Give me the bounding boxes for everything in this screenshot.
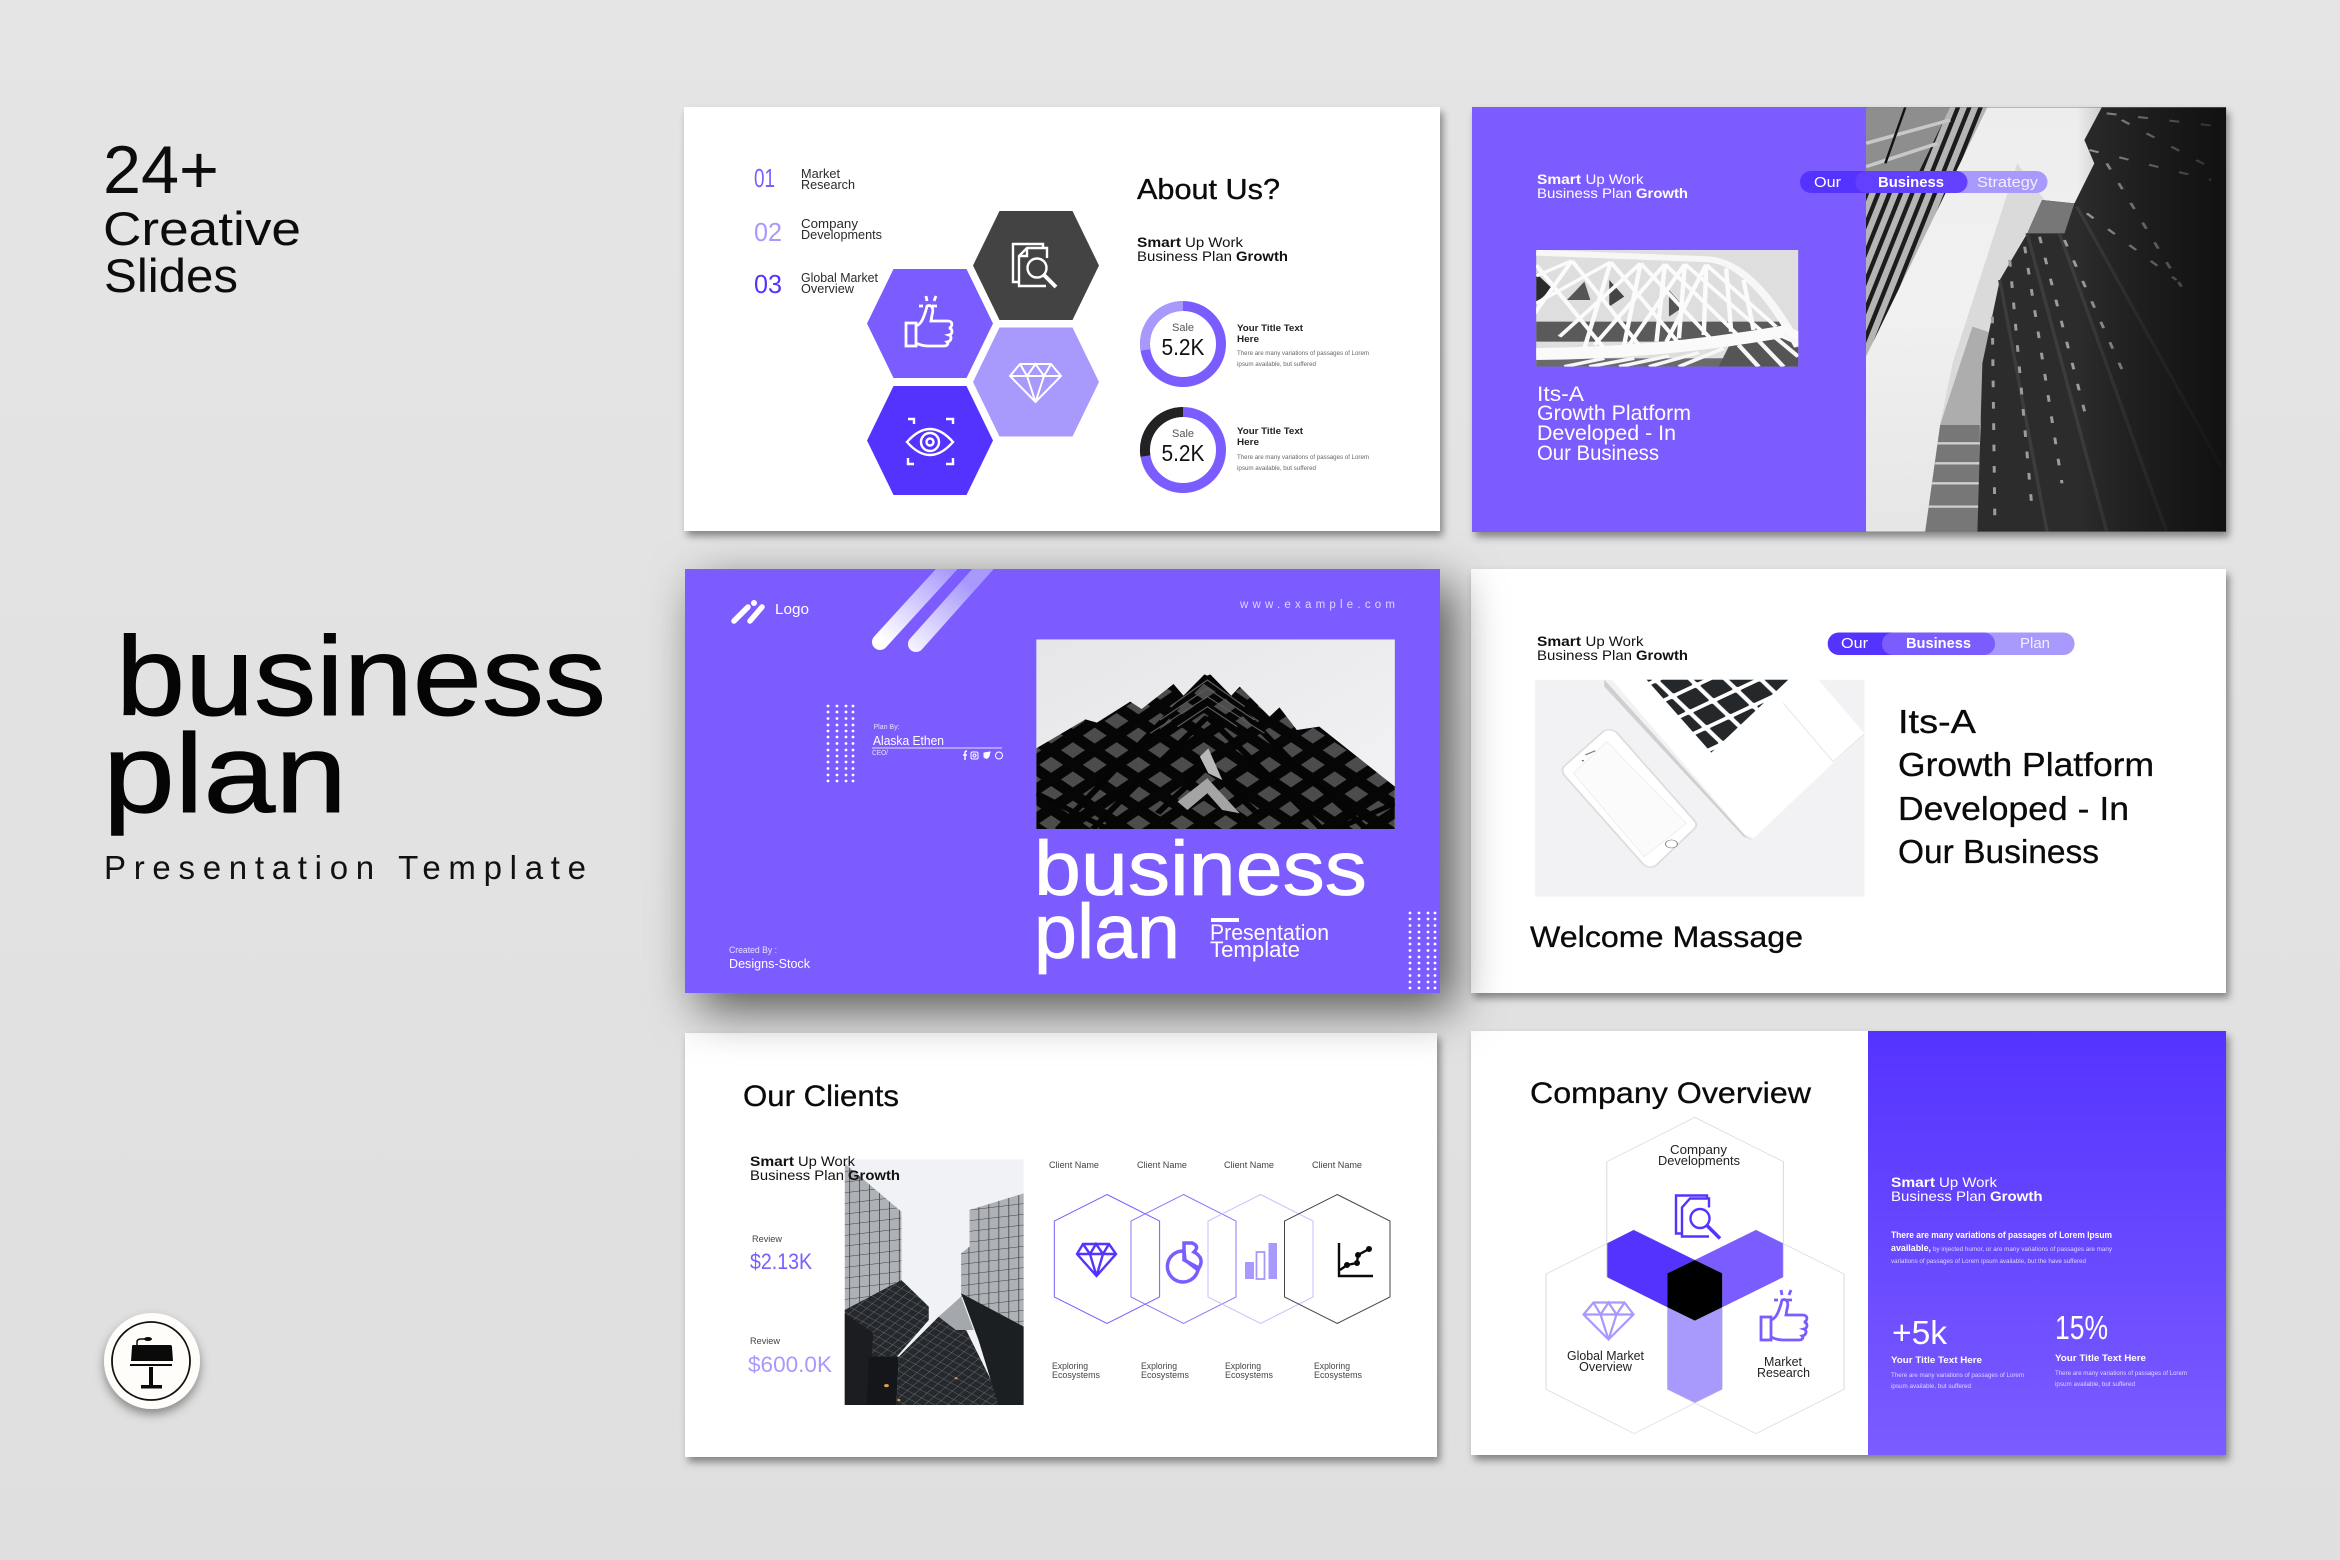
heading: business plan: plan [1034,889,1180,975]
photo: white truss bridge [1535,250,1798,367]
subheading: Up Work [1586,171,1645,187]
subheading: Business Plan [1537,647,1632,663]
donut chart: sale one: Sale [1172,322,1194,334]
diagram labels: Research [1757,1365,1810,1380]
heading: business plan [103,614,606,836]
text block: second stat: There are many variations of passages of Lorem [1237,454,1369,461]
heading: welcome massage: Welcome Massage [1530,921,1803,954]
photo: black tower against sky [1036,639,1395,829]
numbered list: Developments [801,227,882,242]
heading: about us: About Us? [1137,174,1280,206]
stat: review two: Review [750,1336,781,1346]
subheading: presentation template: Presentation [1210,920,1329,945]
panel: company overview slide [1471,1031,2226,1455]
paragraph: by injected humor, or are many variations of passages are many [1933,1246,2113,1253]
text block: first stat: Here [1237,334,1259,345]
subheading [1537,633,1688,663]
credit block [729,945,811,971]
diagram labels: Overview [1579,1359,1633,1374]
icon: line chart [1339,1243,1373,1276]
donut chart: sale two [1145,412,1221,488]
ecosystem labels: Exploring [1052,1361,1088,1371]
subheading: Business Plan [1137,248,1232,264]
subheading: Up Work [1939,1174,1998,1190]
subheading: Business Plan [750,1167,844,1183]
ecosystem labels [1052,1361,1362,1380]
ecosystem labels: Ecosystems [1141,1370,1189,1380]
stat: fifteen percent: 15% [2055,1309,2108,1346]
numbered list [754,163,882,299]
stat: fifteen percent [2055,1309,2187,1388]
panel: about us slide [684,107,1440,531]
client labels: Client Name [1049,1160,1099,1170]
icon: purple diamond [1077,1244,1116,1276]
hexagon cluster [867,211,1099,495]
stat: review one: $2.13K [750,1249,812,1274]
stat: plus five k [1891,1314,2024,1390]
heading: company overview: Company Overview [1530,1077,1811,1110]
stat: plus five k: Your Title Text Here [1891,1355,1982,1366]
icon: thumbs up [1761,1290,1807,1340]
social icons [963,751,1002,760]
panel: cover slide [685,560,1440,993]
pill navigation: Strategy [1977,174,2039,191]
dot grid [827,705,854,782]
text block: second stat: Here [1237,437,1259,448]
dot grid [1409,912,1436,989]
headline text: Growth Platform [1898,746,2154,783]
heading: 24+ creative slides: Creative [103,202,301,255]
logo [734,600,809,621]
right gradient panel [1868,1031,2226,1455]
photo: glass towers [845,1159,1024,1405]
text block: first stat [1237,323,1369,368]
subheading: Growth [1636,647,1688,663]
diagram labels: Developments [1658,1153,1740,1168]
ecosystem labels: Exploring [1141,1361,1177,1371]
logo: Logo [775,601,809,618]
subheading [1891,1174,2042,1204]
heading: our clients: Our Clients [743,1080,899,1113]
headline text: Its-A [1898,703,1976,740]
subheading: presentation template: Template [1210,937,1300,962]
ecosystem labels: Ecosystems [1225,1370,1273,1380]
icon: thumbs up [906,296,952,346]
subheading [1537,171,1688,201]
headline text: Developed - In [1898,790,2129,827]
website url: www.example.com [1239,599,1395,611]
heading: business plan: business [116,614,606,739]
stat: fifteen percent: There are many variations of passages of Lorem [2055,1370,2187,1377]
icon: document search [1676,1196,1720,1238]
donut chart: sale one: 5.2K [1162,334,1205,360]
pill navigation: Our [1814,174,1841,191]
heading: 24+ creative slides: Slides [104,249,238,302]
subheading: Business Plan [1891,1188,1986,1204]
donut chart: sale two: 5.2K [1162,440,1205,466]
presenter block: Plan By: [874,722,900,731]
pill navigation [1828,632,2074,655]
stat: plus five k: ipsum available, but suffered [1891,1383,1971,1390]
donut chart: sale one [1145,306,1221,382]
numbered list: 02 [754,217,782,247]
photo: phone and laptop [1535,680,1864,897]
subheading: Up Work [1586,633,1645,649]
text block: first stat: ipsum available, but suffered [1237,361,1316,368]
subheading: Smart [1137,234,1181,250]
headline text: Our Business [1898,833,2099,870]
text block: first stat: There are many variations of passages of Lorem [1237,350,1369,357]
icon: pie chart [1167,1243,1201,1282]
stat: review two: $600.0K [748,1352,832,1377]
panel: growth platform slide [1472,107,2226,532]
diagram labels: Global Market [1567,1348,1644,1363]
decorative diagonal stripes [880,560,991,644]
pill navigation: Business [1906,635,1971,652]
stat: review one [750,1234,812,1274]
presenter block: Alaska Ethen [873,734,944,748]
ecosystem labels: Exploring [1314,1361,1350,1371]
subheading: presentation template: Presentation Template [104,849,586,886]
paragraph: There are many variations of passages of Lorem Ipsum [1891,1230,2112,1241]
text block: first stat: Your Title Text [1237,323,1304,334]
icon: diamond [1010,364,1061,402]
ecosystem labels: Ecosystems [1052,1370,1100,1380]
subheading: Growth [1636,185,1688,201]
headline text [1898,703,2154,870]
numbered list: 03 [754,269,782,299]
heading: business plan [1034,826,1367,975]
subheading: presentation template [1210,918,1329,962]
heading: business plan: business [1034,826,1367,912]
icon: document search [1013,244,1056,287]
client labels: Client Name [1224,1160,1274,1170]
headline text [1537,383,1691,465]
subheading: Growth [1236,248,1288,264]
pill navigation: Business [1878,174,1944,191]
subheading: Up Work [1185,234,1244,250]
subheading [1137,234,1288,264]
client labels: Client Name [1137,1160,1187,1170]
icon: eye [907,419,953,464]
stat: fifteen percent: ipsum available, but suffered [2055,1381,2135,1388]
numbered list: Market [801,166,840,181]
icon: keynote badge [104,1313,200,1409]
numbered list: Research [801,177,855,192]
ecosystem labels: Exploring [1225,1361,1261,1371]
stat: plus five k: There are many variations of passages of Lorem [1891,1372,2024,1379]
diagram labels [1567,1142,1810,1380]
diagram labels: Market [1764,1354,1802,1369]
numbered list: Company [801,216,859,231]
numbered list: 01 [754,163,775,193]
subheading: Growth [1990,1188,2042,1204]
subheading [750,1153,900,1183]
credit block: Designs-Stock [729,957,811,971]
numbered list: Global Market [801,270,878,285]
credit block: Created By : [729,945,777,955]
pill navigation: Plan [2020,635,2050,652]
headline text: Its-A [1537,383,1584,406]
paragraph: variations of passages of Lorem ipsum available, but the have suffered [1891,1258,2086,1265]
presenter block: CEO/ [872,748,889,757]
donut chart: sale two: Sale [1172,428,1194,440]
pill navigation: Our [1841,635,1868,652]
subheading: Business Plan [1537,185,1632,201]
subheading: Smart [750,1153,794,1169]
diagram labels: Company [1670,1142,1728,1157]
numbered list: Overview [801,281,855,296]
paragraph [1891,1230,2113,1265]
headline text: Developed - In [1537,422,1676,445]
hexagon venn diagram [1546,1117,1844,1434]
hexagon outlines [1054,1194,1390,1324]
icon: diamond [1584,1302,1634,1340]
paragraph: available, [1891,1243,1931,1254]
text block: second stat [1237,426,1369,472]
stat: review one: Review [752,1234,783,1244]
client labels: Client Name [1312,1160,1362,1170]
text block: second stat: ipsum available, but suffered [1237,465,1316,472]
stat: plus five k: +5k [1892,1314,1948,1351]
subheading: Up Work [798,1153,856,1169]
presenter block [872,722,1002,760]
headline text: Our Business [1537,442,1659,465]
icon: bar chart [1245,1243,1277,1279]
client labels [1049,1160,1362,1170]
stat: fifteen percent: Your Title Text Here [2055,1353,2146,1364]
headline text: Growth Platform [1537,402,1691,425]
heading: business plan: plan [103,711,347,836]
ecosystem labels: Ecosystems [1314,1370,1362,1380]
stat: review two [748,1336,832,1377]
subheading: Smart [1537,633,1581,649]
text block: second stat: Your Title Text [1237,426,1304,437]
panel: our clients slide [685,1033,1437,1457]
subheading: Growth [848,1167,900,1183]
pill navigation [1800,171,2048,193]
panel: welcome message slide [1471,569,2226,993]
photo: skyscrapers from below [1866,107,2226,532]
subheading: Smart [1537,171,1581,187]
subheading: Smart [1891,1174,1935,1190]
heading: 24+ creative slides: 24+ [103,132,219,208]
heading: 24+ creative slides [103,132,301,302]
